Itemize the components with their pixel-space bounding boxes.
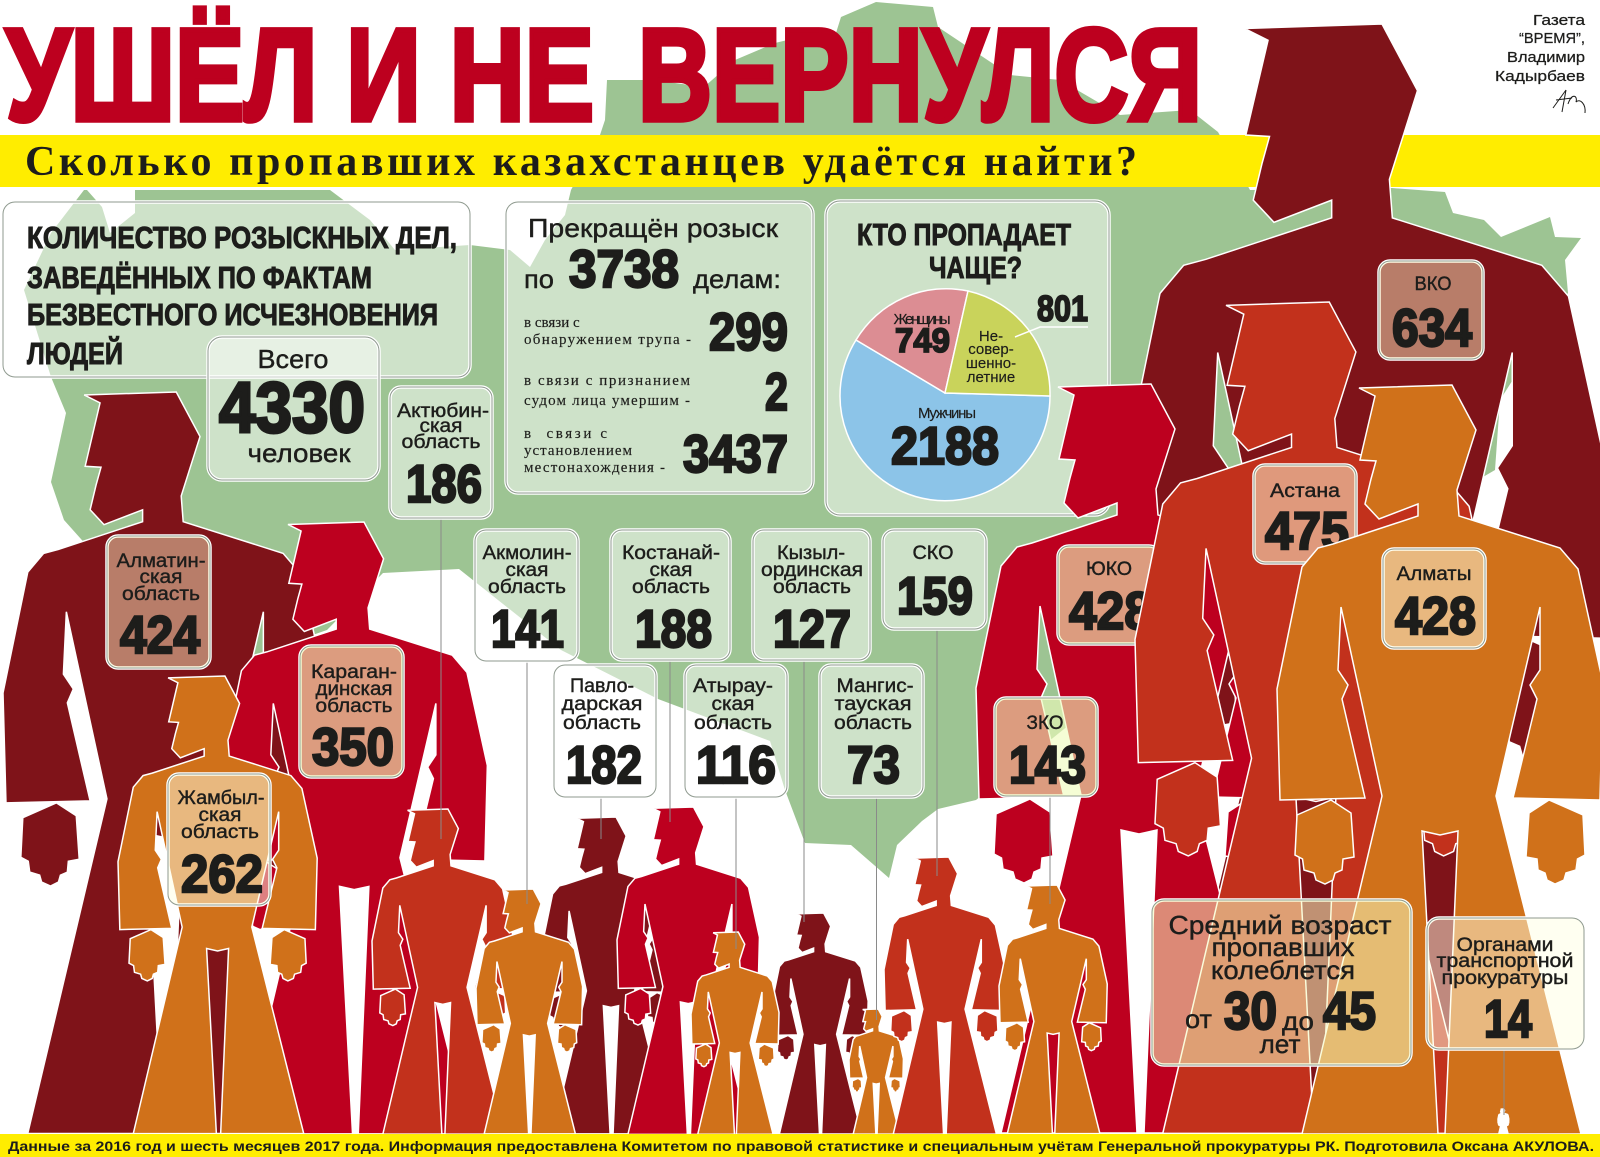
box: Aktobe: ская — [420, 416, 462, 437]
figure: Almaty city man — [1277, 385, 1600, 1134]
box: Kostanay: ская — [650, 560, 692, 581]
box: Kyzylorda — [753, 530, 870, 660]
panel: who goes missing more often: шенно- — [966, 355, 1016, 372]
panel: search stopped: Прекращён розыск — [528, 213, 779, 243]
box: Astana: Астана — [1270, 481, 1340, 502]
figure: Akmola man — [476, 889, 583, 1134]
box: Akmola — [475, 530, 578, 661]
panel: who goes missing more often: ЧАЩЕ? — [929, 250, 1022, 285]
box: Mangistau: 73 — [847, 736, 900, 795]
box: Astana: 475 — [1265, 502, 1349, 561]
figure: ZKO man — [999, 885, 1107, 1134]
panel: average age: колеблется — [1211, 955, 1355, 985]
box: total — [208, 337, 379, 480]
box: Kostanay: Костанай- — [622, 543, 720, 564]
box: Kyzylorda: Кызыл- — [777, 543, 845, 564]
box: ZKO — [995, 698, 1097, 796]
box: Atyrau: область — [694, 713, 772, 734]
credit: Кадырбаев — [1495, 68, 1585, 85]
panel: total cases heading — [3, 202, 470, 377]
panel: transport prosecutor: прокуратуры — [1442, 968, 1568, 989]
figure: YuKO man — [976, 384, 1302, 1133]
box: Zhambyl: область — [181, 822, 259, 843]
panel: search stopped: установлением — [524, 443, 632, 459]
box: SKO: СКО — [912, 543, 954, 564]
box: Almaty city: Алматы — [1396, 564, 1472, 585]
box: YuKO — [1058, 546, 1160, 644]
panel: who goes missing more often: совер- — [968, 341, 1014, 358]
panel: average age: от — [1185, 1004, 1212, 1034]
box: Mangistau: тауская — [834, 694, 912, 715]
box: Aktobe: 186 — [406, 455, 482, 514]
box: Almaty region: Алматин- — [116, 551, 206, 572]
panel: average age: лет — [1260, 1029, 1301, 1059]
box: Karaganda: область — [316, 696, 393, 717]
box: Aktobe: область — [402, 432, 481, 453]
subtitle band — [0, 135, 1600, 187]
box: Mangistau — [820, 665, 923, 797]
figure: Kyzylorda man — [772, 913, 868, 1134]
panel: average age: 30 — [1224, 982, 1277, 1041]
box: VKO: 634 — [1392, 299, 1472, 358]
credit: Владимир — [1507, 49, 1585, 66]
box: Almaty region: ская — [140, 567, 182, 588]
panel: search stopped: судом лица умершим - — [524, 393, 690, 409]
box: Pavlodar: область — [563, 713, 641, 734]
map of Kazakhstan — [24, 2, 1581, 878]
figure: Almaty region man — [3, 392, 326, 1134]
box: Atyrau: Атырау- — [693, 676, 773, 697]
panel: transport prosecutor: 14 — [1484, 990, 1532, 1049]
box: Atyrau: ская — [712, 694, 754, 715]
figure: Pavlodar man — [542, 817, 680, 1134]
box: Akmola: Акмолин- — [482, 543, 572, 564]
box: total: 4330 — [219, 369, 365, 448]
box: Kyzylorda: ординская — [761, 560, 863, 581]
box: Akmola: ская — [506, 560, 548, 581]
panel: average age — [1152, 900, 1411, 1065]
panel: total cases heading: БЕЗВЕСТНОГО ИСЧЕЗНОВЕНИЯ — [27, 297, 438, 332]
figure: VKO man — [1123, 24, 1600, 1133]
credit — [1495, 12, 1586, 113]
box: VKO — [1379, 261, 1483, 359]
footer source band: Данные за 2016 год и шесть месяцев 2017 года. Информация предоставлена Комитетом по правовой статистике и специальным учётам Генеральной прокуратуры РК. Подготовила Оксана АКУЛОВА. — [8, 1138, 1594, 1154]
box: Pavlodar: дарская — [562, 694, 642, 715]
subtitle band: Сколько пропавших казахстанцев удаётся найти? — [25, 139, 1137, 185]
box: Zhambyl: ская — [198, 805, 242, 826]
box: SKO — [883, 530, 986, 629]
box: Pavlodar: 182 — [566, 736, 642, 795]
box: YuKO: ЮКО — [1086, 559, 1132, 580]
box: Atyrau: 116 — [696, 736, 776, 795]
box: VKO: ВКО — [1414, 274, 1452, 295]
box: total: человек — [248, 438, 351, 468]
box: Karaganda — [300, 646, 403, 777]
title: ВЕРНУЛСЯ — [638, 1, 1202, 148]
box: Akmola: область — [488, 577, 566, 598]
panel: search stopped: 299 — [709, 303, 788, 362]
pie chart — [840, 289, 1050, 501]
figure: Kostanay man — [617, 807, 759, 1134]
figure: Astana man — [1135, 302, 1497, 1133]
figure: Aktobe man — [372, 809, 513, 1134]
box: SKO: 159 — [897, 567, 973, 626]
box: Astana — [1254, 465, 1356, 563]
panel: transport prosecutor: Органами — [1456, 935, 1554, 956]
title: УШЁЛ И НЕ — [6, 1, 594, 148]
panel: average age: до — [1282, 1006, 1314, 1036]
figure: transport prosecutor tiny man — [1498, 1109, 1509, 1134]
panel: search stopped: 3437 — [683, 425, 788, 484]
panel: average age: Средний возраст — [1168, 910, 1392, 940]
panel: search stopped: 3738 — [569, 240, 679, 299]
box: Aktobe: Актюбин- — [397, 401, 489, 422]
panel: total cases heading: ЗАВЕДЁННЫХ ПО ФАКТАМ — [27, 260, 372, 295]
connector lines — [441, 518, 1504, 1115]
panel: search stopped: обнаружением трупа - — [524, 332, 691, 348]
panel: who goes missing more often: Мужчины — [918, 405, 976, 422]
figure: SKO man — [884, 857, 1005, 1134]
panel: who goes missing more often: летние — [967, 369, 1015, 386]
box: Zhambyl — [168, 774, 270, 905]
panel: who goes missing more often: Не- — [979, 328, 1003, 345]
footer source band — [0, 1134, 1600, 1157]
box: total: Всего — [258, 344, 328, 374]
box: Karaganda: 350 — [312, 718, 394, 777]
panel: search stopped: 2 — [765, 363, 788, 422]
box: Kostanay: область — [632, 577, 710, 598]
box: Almaty region — [107, 536, 210, 668]
panel: transport prosecutor: транспортной — [1436, 951, 1574, 972]
panel: average age: 45 — [1323, 982, 1376, 1041]
panel: search stopped: в связи с — [524, 426, 607, 442]
box: Almaty city — [1383, 549, 1485, 648]
panel: who goes missing more often: 2188 — [891, 417, 999, 476]
credit: “ВРЕМЯ”, — [1519, 30, 1585, 47]
box: Kostanay: 188 — [635, 600, 712, 659]
panel: search stopped: по — [524, 264, 554, 294]
box: Almaty region: 424 — [120, 606, 200, 665]
box: Mangistau: область — [834, 713, 912, 734]
figure: Atyrau man — [691, 932, 779, 1134]
box: Kostanay — [611, 530, 730, 660]
box: Kyzylorda: область — [773, 577, 851, 598]
panel: total cases heading: КОЛИЧЕСТВО РОЗЫСКНЫХ ДЕЛ, — [27, 220, 457, 255]
box: Karaganda: Караган- — [311, 662, 397, 683]
panel: search stopped — [506, 202, 813, 493]
box: ZKO: 143 — [1009, 736, 1086, 795]
box: Mangistau: Мангис- — [836, 676, 914, 697]
panel: who goes missing more often: 801 — [1037, 288, 1088, 329]
box: ZKO: ЗКО — [1026, 713, 1064, 734]
box: Pavlodar — [554, 665, 656, 797]
figure: Karaganda man — [221, 522, 487, 1134]
box: YuKO: 428 — [1069, 582, 1152, 641]
panel: search stopped: местонахождения - — [524, 460, 665, 476]
panel: search stopped: в связи с признанием — [524, 373, 690, 389]
box: Zhambyl: Жамбыл- — [178, 788, 264, 809]
panel: search stopped: в связи с — [524, 315, 580, 331]
box: Aktobe — [390, 387, 492, 518]
panel: search stopped: делам: — [693, 264, 781, 294]
box: Akmola: 141 — [491, 600, 564, 659]
credit: Газета — [1533, 12, 1586, 29]
box: Pavlodar: Павло- — [570, 676, 634, 697]
panel: who goes missing more often: КТО ПРОПАДАЕТ — [857, 217, 1071, 252]
box: Zhambyl: 262 — [181, 845, 263, 904]
title — [6, 1, 1202, 148]
box: Almaty region: область — [122, 584, 200, 605]
box: Almaty city: 428 — [1395, 587, 1476, 646]
figure: Mangistau man — [849, 1009, 903, 1134]
box: Atyrau — [685, 665, 787, 797]
panel: who goes missing more often: 749 — [895, 322, 950, 360]
box: Kyzylorda: 127 — [773, 600, 851, 659]
panel: average age: пропавших — [1212, 932, 1354, 962]
panel: who goes missing more often: Женщины — [894, 311, 950, 328]
panel: transport prosecutor — [1427, 918, 1584, 1049]
panel: who goes missing more often — [826, 201, 1109, 515]
panel: total cases heading: ЛЮДЕЙ — [27, 335, 123, 371]
figure: Zhambyl man — [118, 676, 317, 1134]
box: Karaganda: динская — [316, 679, 392, 700]
